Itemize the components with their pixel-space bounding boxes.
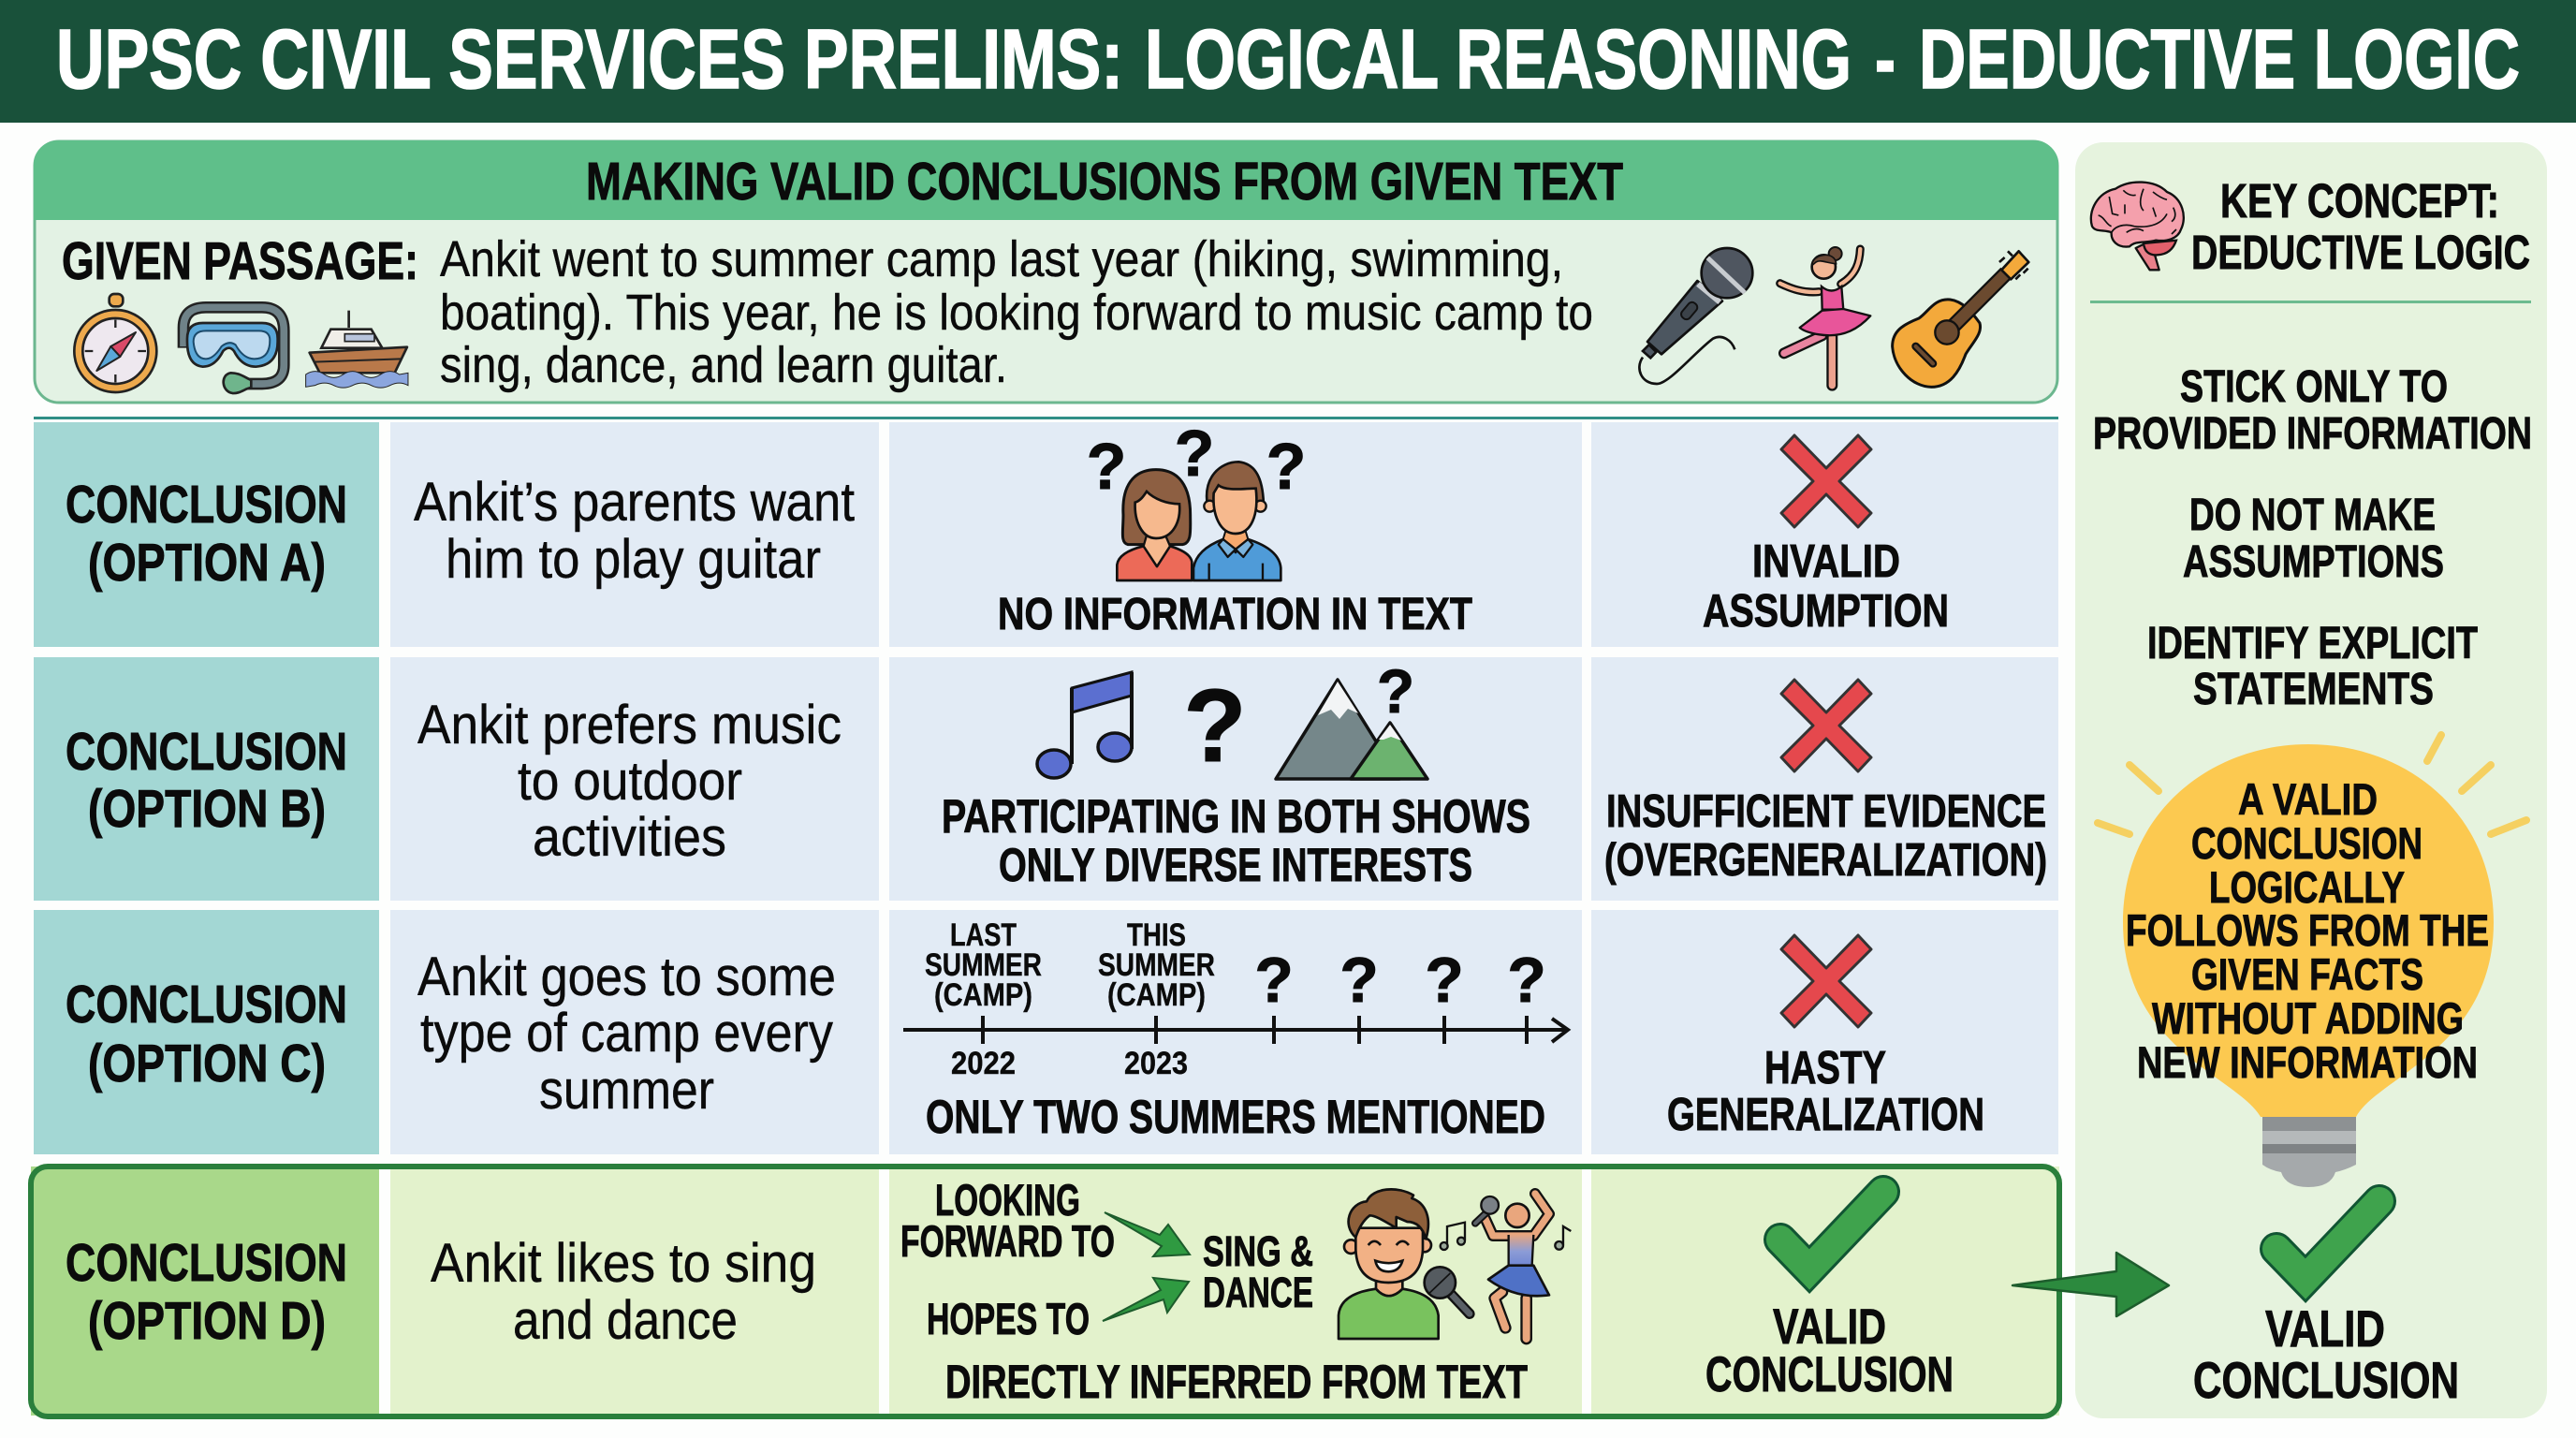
- analysis: directly inferred: SING &: [1203, 1227, 1313, 1275]
- row: option D (valid): [31, 1167, 2059, 1416]
- analysis: timeline: ONLY TWO SUMMERS MENTIONED: [926, 1091, 1545, 1143]
- icon: red cross: [1781, 435, 1871, 527]
- icon: music notes: [1037, 672, 1132, 778]
- tip: explicit statements: [2147, 619, 2478, 714]
- analysis: timeline: [889, 910, 1582, 1154]
- timeline chart: ?: [1339, 945, 1379, 1016]
- statement: option C: type of camp every: [420, 1003, 833, 1064]
- analysis: no information: [889, 417, 1582, 647]
- tip: no assumptions: [2183, 491, 2444, 587]
- analysis: no information: NO INFORMATION IN TEXT: [998, 590, 1472, 639]
- label: option D: (OPTION D): [88, 1291, 326, 1351]
- icon: question mark: ?: [1183, 668, 1247, 784]
- timeline chart: (CAMP): [934, 977, 1032, 1013]
- timeline chart: ?: [1425, 945, 1464, 1016]
- label: option B: (OPTION B): [88, 779, 326, 839]
- icons: question marks: [1087, 417, 1306, 503]
- tip: no assumptions: DO NOT MAKE: [2189, 491, 2436, 540]
- result text: VALID: [2265, 1299, 2385, 1357]
- arrow: looking forward to sing and dance: [1105, 1212, 1190, 1256]
- result text: [2193, 1299, 2459, 1409]
- timeline chart: (CAMP): [1107, 977, 1206, 1013]
- result text: CONCLUSION: [2193, 1351, 2459, 1409]
- arrow: row D to key concept: [2012, 1253, 2169, 1316]
- passage text: [440, 231, 1593, 393]
- statement: option D: and dance: [513, 1290, 738, 1351]
- statement: option C: Ankit goes to some: [417, 946, 836, 1007]
- passage text: sing, dance, and learn guitar.: [440, 337, 1007, 393]
- icon: red cross: [1781, 935, 1871, 1027]
- analysis: diverse interests: ONLY DIVERSE INTERESTS: [999, 839, 1472, 891]
- label: option A: [34, 422, 379, 647]
- icon: microphone: [1639, 248, 1752, 384]
- panel heading: [2191, 174, 2530, 279]
- statement: option C: summer: [539, 1060, 714, 1121]
- icon: light bulb with definition: LOGICALLY: [2209, 862, 2405, 912]
- label: option C: CONCLUSION: [66, 975, 347, 1034]
- icon: snorkel mask: [183, 307, 284, 393]
- icon: happy boy with microphone: [1339, 1189, 1571, 1339]
- verdict: hasty generalization: [1591, 910, 2058, 1154]
- tip: no assumptions: ASSUMPTIONS: [2183, 537, 2444, 587]
- verdict: valid conclusion: VALID: [1773, 1299, 1886, 1355]
- verdict: invalid assumption: INVALID: [1752, 536, 1900, 587]
- icon: compass: [74, 294, 156, 392]
- icon: light bulb with definition: CONCLUSION: [2191, 818, 2422, 868]
- panel: key concept: [2075, 142, 2547, 1418]
- icon: dancer with microphone: [1475, 1194, 1549, 1339]
- analysis: directly inferred: DANCE: [1203, 1269, 1313, 1316]
- tip: stick to information: STICK ONLY TO: [2180, 362, 2448, 412]
- icons: question marks: ?: [1175, 417, 1214, 490]
- timeline chart: LAST: [950, 917, 1017, 953]
- icon: boat: [306, 311, 408, 388]
- row: option C: [34, 910, 2058, 1154]
- analysis: diverse interests: [889, 656, 1582, 901]
- icon: guitar: [1893, 251, 2028, 387]
- statement: option A: him to play guitar: [446, 529, 821, 590]
- timeline chart: SUMMER: [1098, 947, 1215, 983]
- icon: red cross: [1781, 680, 1871, 771]
- label: option C: (OPTION C): [88, 1034, 326, 1093]
- icon: light bulb with definition: GIVEN FACTS: [2191, 949, 2423, 999]
- verdict: insufficient evidence: [1591, 657, 2058, 901]
- tip: explicit statements: STATEMENTS: [2193, 665, 2434, 714]
- verdict: valid conclusion: [1591, 1167, 2059, 1416]
- verdict: hasty generalization: HASTY: [1764, 1043, 1886, 1093]
- statement: option A: Ankit’s parents want: [414, 472, 855, 533]
- row: option B: [34, 656, 2058, 901]
- verdict: invalid assumption: [1591, 422, 2058, 647]
- icon: light bulb with definition: A VALID: [2238, 774, 2378, 824]
- icon: brain: [2091, 183, 2184, 270]
- analysis: directly inferred: LOOKING: [935, 1175, 1080, 1225]
- panel heading: MAKING VALID CONCLUSIONS FROM GIVEN TEXT: [586, 152, 1623, 212]
- icons: question marks: ?: [1266, 430, 1306, 503]
- timeline chart: 2023: [1124, 1046, 1188, 1081]
- statement: option B: Ankit prefers music: [417, 695, 842, 756]
- timeline chart: THIS: [1127, 917, 1186, 953]
- analysis: directly inferred: HOPES TO: [927, 1294, 1090, 1343]
- panel: given passage: [34, 140, 2058, 403]
- timeline chart: [903, 917, 1568, 1081]
- icon: ballet dancer: [1780, 247, 1870, 386]
- label: option C: [34, 910, 379, 1154]
- label: option B: [34, 657, 379, 901]
- title banner: LOGICAL REASONING: [1145, 13, 1852, 107]
- passage text: Ankit went to summer camp last year (hiking, swimming,: [440, 231, 1563, 287]
- verdict: invalid assumption: ASSUMPTION: [1703, 586, 1949, 637]
- icon: light bulb with definition: FOLLOWS FROM THE: [2126, 905, 2489, 955]
- icon: mountains: [1276, 680, 1427, 779]
- verdict: valid conclusion: CONCLUSION: [1705, 1347, 1954, 1402]
- timeline chart: ?: [1254, 945, 1294, 1016]
- timeline chart: ?: [1507, 945, 1546, 1016]
- label: option A: (OPTION A): [88, 533, 326, 593]
- icon: green check: [2276, 1201, 2379, 1279]
- analysis: directly inferred: DIRECTLY INFERRED FROM TEXT: [945, 1356, 1528, 1408]
- statement: option B: activities: [533, 807, 726, 868]
- tip: explicit statements: IDENTIFY EXPLICIT: [2147, 619, 2478, 668]
- analysis: diverse interests: PARTICIPATING IN BOTH SHOWS: [942, 790, 1530, 843]
- passage text: boating). This year, he is looking forward to music camp to: [440, 285, 1593, 341]
- panel heading: KEY CONCEPT:: [2220, 174, 2499, 227]
- statement: option B: [390, 657, 879, 901]
- title banner: -: [1875, 13, 1895, 107]
- verdict: insufficient evidence: (OVERGENERALIZATION): [1604, 835, 2047, 886]
- label: option D: [31, 1167, 379, 1416]
- statement: option B: to outdoor: [518, 751, 742, 812]
- icon: small question mark: ?: [1377, 656, 1414, 726]
- timeline chart: 2022: [951, 1046, 1016, 1081]
- passage label: GIVEN PASSAGE:: [62, 231, 418, 291]
- analysis: directly inferred: FORWARD TO: [900, 1216, 1115, 1266]
- verdict: hasty generalization: GENERALIZATION: [1667, 1090, 1984, 1140]
- icon: light bulb with definition: WITHOUT ADDING: [2152, 993, 2464, 1043]
- icon: light bulb with definition: [2098, 735, 2526, 1187]
- icon: confused parents: [1117, 462, 1281, 580]
- arrow: hopes to sing and dance: [1103, 1278, 1189, 1321]
- row: option A: [34, 417, 2058, 647]
- statement: option D: [390, 1167, 879, 1416]
- timeline chart: SUMMER: [925, 947, 1042, 983]
- tip: stick to information: [2093, 362, 2532, 459]
- icon: green check: [1780, 1192, 1883, 1269]
- statement: option C: [390, 910, 879, 1154]
- verdict: insufficient evidence: INSUFFICIENT EVIDENCE: [1606, 786, 2046, 837]
- title banner: UPSC CIVIL SERVICES PRELIMS:: [56, 13, 1123, 107]
- icons: question marks: ?: [1087, 430, 1126, 503]
- label: option A: CONCLUSION: [66, 475, 347, 535]
- label: option B: CONCLUSION: [66, 722, 347, 782]
- title banner: [0, 0, 2576, 123]
- statement: option A: [390, 422, 879, 647]
- analysis: directly inferred: [889, 1167, 1582, 1416]
- label: option D: CONCLUSION: [66, 1233, 347, 1293]
- statement: option D: Ankit likes to sing: [431, 1233, 816, 1294]
- icon: light bulb with definition: NEW INFORMATION: [2137, 1037, 2478, 1087]
